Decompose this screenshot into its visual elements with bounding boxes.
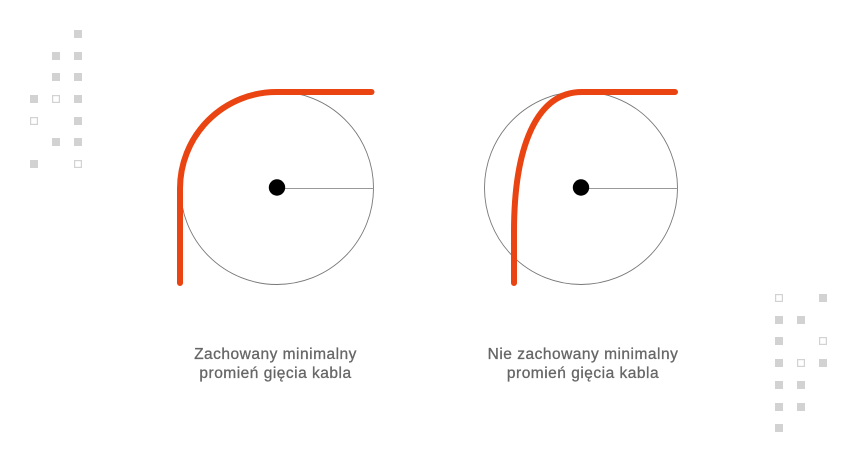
centre point: [573, 179, 589, 196]
bend radius circle: [180, 92, 374, 284]
bend radius circle: [484, 92, 678, 284]
radius line: [581, 188, 678, 190]
decorative squares: bottom right: [775, 294, 827, 432]
diagram: minimum bend radius not kept: [484, 92, 678, 284]
centre point: [269, 179, 285, 196]
diagram: minimum bend radius kept: [180, 92, 374, 284]
caption: kept: Zachowany minimalny: [194, 346, 357, 363]
caption: not kept: promień gięcia kabla: [507, 365, 659, 382]
cable: [514, 92, 675, 283]
decorative squares: top left: [30, 30, 82, 168]
caption: not kept: Nie zachowany minimalny: [488, 346, 678, 363]
cable: [180, 92, 372, 283]
radius line: [277, 188, 374, 190]
caption: kept: promień gięcia kabla: [199, 365, 352, 382]
